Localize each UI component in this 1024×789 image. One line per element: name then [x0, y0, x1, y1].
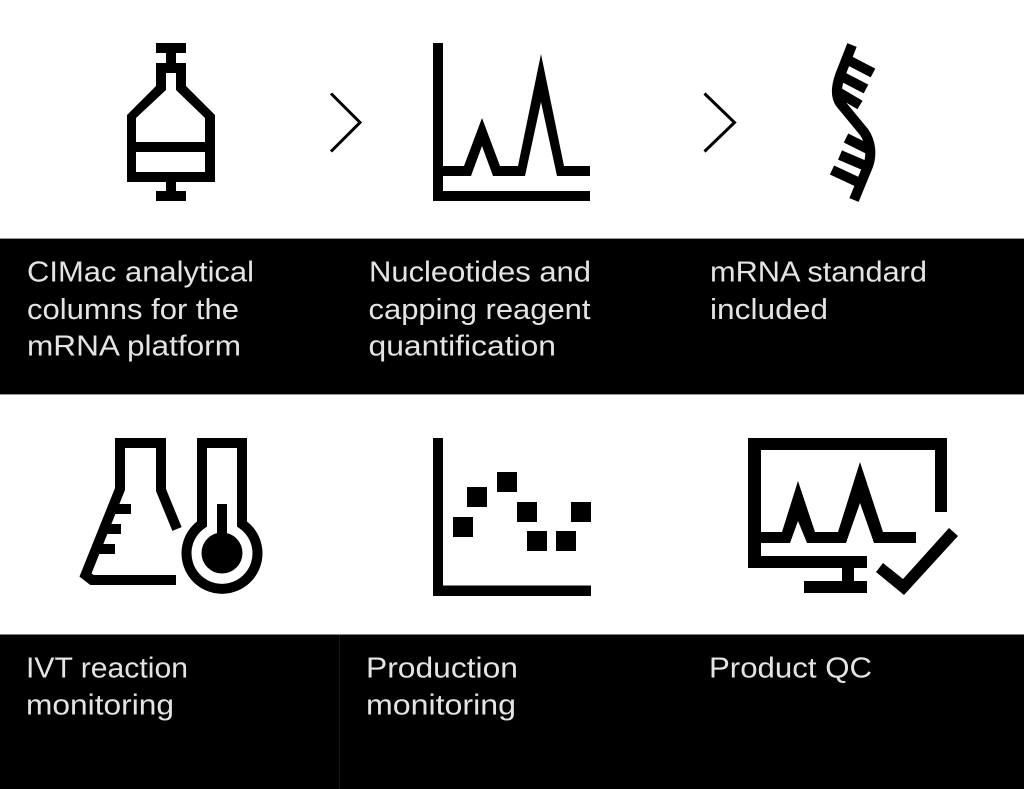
- icon: flask: [86, 443, 177, 580]
- icon: monitor with chromatogram and check mark: [748, 438, 958, 595]
- icon: chromatography column: [127, 43, 215, 201]
- text: product QC caption: Product QC: [709, 653, 872, 685]
- arrow: first chevron: [331, 94, 360, 152]
- text: IVT reaction monitoring caption: IVT reaction: [26, 653, 188, 685]
- panel: bottom caption band: [0, 634, 1024, 789]
- text: nucleotides caption: capping reagent: [368, 294, 590, 326]
- text: production monitoring caption: monitoring: [366, 689, 516, 721]
- text: CIMac analytical columns caption: CIMac analytical: [27, 256, 254, 288]
- text: IVT reaction monitoring caption: [26, 653, 188, 721]
- arrow: second chevron: [704, 94, 734, 152]
- text: nucleotides caption: Nucleotides and: [369, 256, 591, 288]
- text: CIMac analytical columns caption: [27, 256, 254, 363]
- icon: check mark: [876, 528, 958, 595]
- icon: scatter plot: [433, 438, 591, 596]
- text: IVT reaction monitoring caption: monitoring: [26, 689, 174, 721]
- icon: thermometer: [186, 443, 258, 589]
- text: mRNA standard caption: mRNA standard: [710, 256, 927, 288]
- text: production monitoring caption: Production: [366, 653, 518, 685]
- icon: chromatogram with two peaks: [433, 43, 590, 201]
- icon: flask and thermometer: [86, 443, 258, 589]
- text: production monitoring caption: [366, 653, 518, 721]
- icon: mRNA strand: [832, 45, 873, 200]
- panel: top caption band: [0, 239, 1024, 394]
- text: nucleotides caption: [368, 256, 591, 363]
- text: mRNA standard caption: included: [710, 294, 828, 326]
- text: mRNA standard caption: [710, 256, 927, 326]
- text: CIMac analytical columns caption: mRNA platform: [27, 331, 241, 363]
- text: CIMac analytical columns caption: columns for the: [27, 294, 239, 326]
- text: nucleotides caption: quantification: [368, 331, 556, 363]
